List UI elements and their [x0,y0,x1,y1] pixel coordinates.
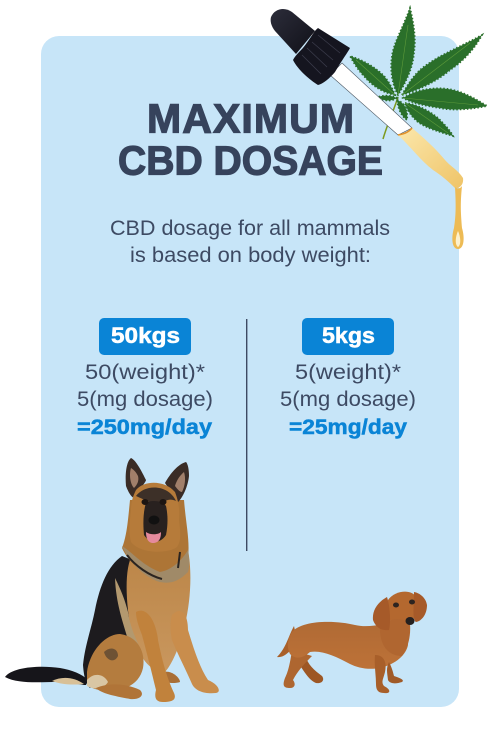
result: 25mg/day: =25mg/day [289,416,407,439]
formula: 50kg: 50(weight)* [85,361,205,384]
neck ruff [122,500,189,581]
result: 250mg/day: =250mg/day [77,416,212,439]
tongue [146,532,161,543]
formula: 5kg: 5(mg dosage) [280,388,416,411]
intro text [110,217,390,267]
hind paw [96,684,142,699]
badge: 50kgs: 50kgs [111,323,180,348]
chest and body [127,550,190,672]
formula: 5kg: 5(weight)* [295,361,401,384]
badge: 5kgs: 5kgs [322,323,375,348]
ear left [126,458,146,498]
tail [277,626,297,657]
icon: cannabis leaf [350,8,487,139]
head [388,592,417,628]
column: 50kgs [77,318,213,439]
forehead mask [136,488,176,505]
formula: 50kg: 5(mg dosage) [77,388,213,411]
formula: 5kg [280,361,416,411]
illustration: dachshund [277,592,427,693]
oil in tube [398,128,463,188]
ear right [414,592,427,622]
rubber bulb [271,9,315,54]
title [118,96,383,184]
screw cap [293,28,350,85]
illustration: german shepherd [5,458,219,702]
eyes [142,499,148,505]
formula: 50kg [77,361,213,411]
body [288,622,408,669]
column: 5kgs [280,318,416,439]
column divider [246,319,247,551]
far hind leg [298,655,323,683]
ear right [165,462,189,503]
icon: dropper with oil [271,9,464,249]
title: MAXIMUM [147,96,354,142]
intro text: is based on body weight: [130,244,371,267]
tail [5,667,88,685]
eyes [393,602,399,608]
ear left [373,597,390,630]
muzzle [143,501,168,542]
nose [148,516,160,524]
far hind paw [163,672,180,683]
intro text: CBD dosage for all mammals [110,217,390,240]
front legs [375,655,389,693]
neck [380,619,410,656]
haunch [87,634,144,690]
flank highlight [115,578,140,648]
title: CBD DOSAGE [118,138,383,184]
head [129,483,180,552]
background panel [41,36,459,707]
front leg left [136,611,175,702]
nose [406,617,414,625]
drip [452,186,464,249]
front leg right [170,611,219,693]
near hind leg [284,650,312,688]
glass tube [330,63,412,135]
black back [83,556,134,688]
